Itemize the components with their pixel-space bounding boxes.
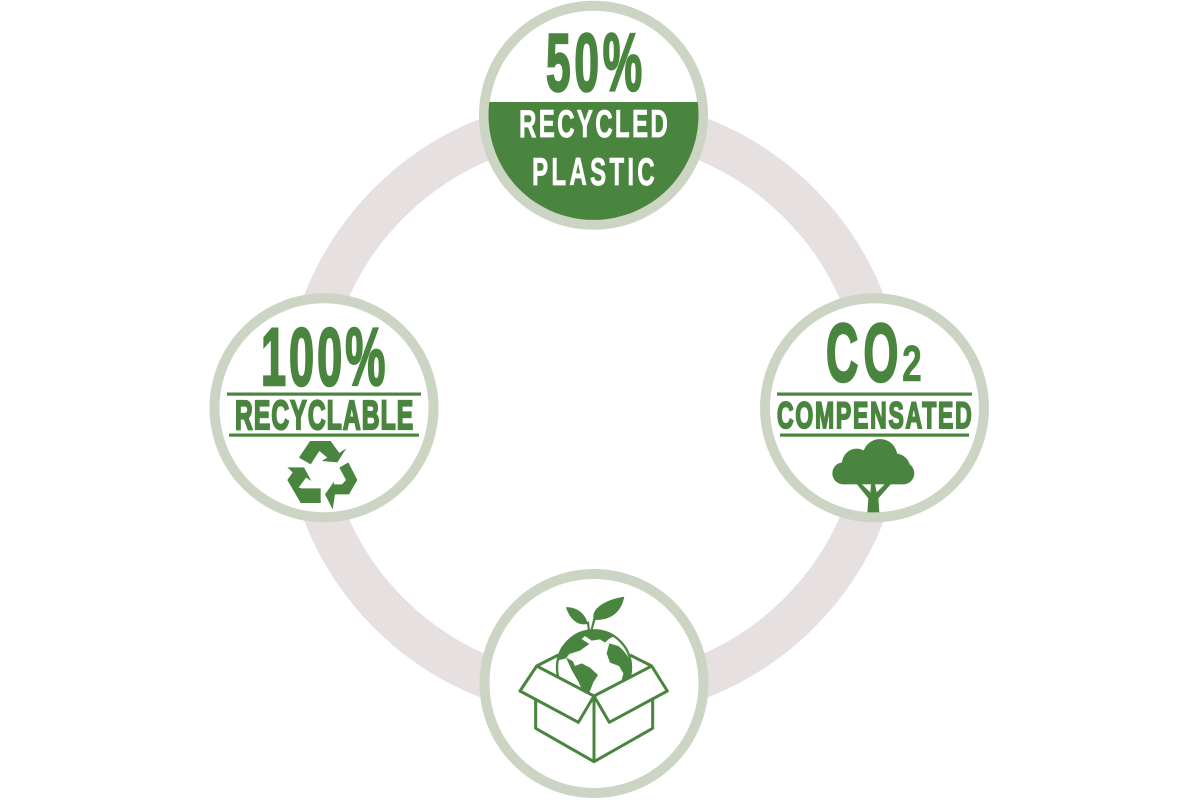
badge ring — [484, 6, 703, 225]
green lower segment — [488, 102, 698, 220]
badge: CO2 compensated — [765, 298, 984, 517]
label: compensated: COMPENSATED — [777, 394, 972, 436]
lower rule — [780, 434, 969, 437]
badge: 100% recyclable — [214, 298, 434, 517]
heading: 100%: 100% — [261, 312, 385, 404]
badge: 50% recycled plastic — [484, 6, 703, 225]
badge ring — [765, 298, 984, 517]
heading: 50%: 50% — [546, 16, 642, 108]
lower rule — [229, 434, 419, 437]
label: recyclable: RECYCLABLE — [235, 393, 413, 439]
icon: open box — [520, 655, 667, 762]
badge ring — [214, 298, 434, 517]
icon: leaves and globe — [557, 597, 632, 704]
subscript 2: 2 — [902, 336, 922, 393]
connecting ring — [304, 118, 884, 698]
upper rule — [227, 392, 421, 396]
badge ring — [484, 574, 704, 793]
badge: globe in box — [484, 574, 704, 793]
upper rule — [777, 392, 972, 396]
heading: CO2: CO — [826, 308, 898, 400]
icon: recycling arrows — [287, 441, 357, 509]
label: recycled: RECYCLED — [519, 102, 668, 145]
icon: tree — [832, 439, 914, 512]
label: plastic: PLASTIC — [532, 150, 655, 193]
